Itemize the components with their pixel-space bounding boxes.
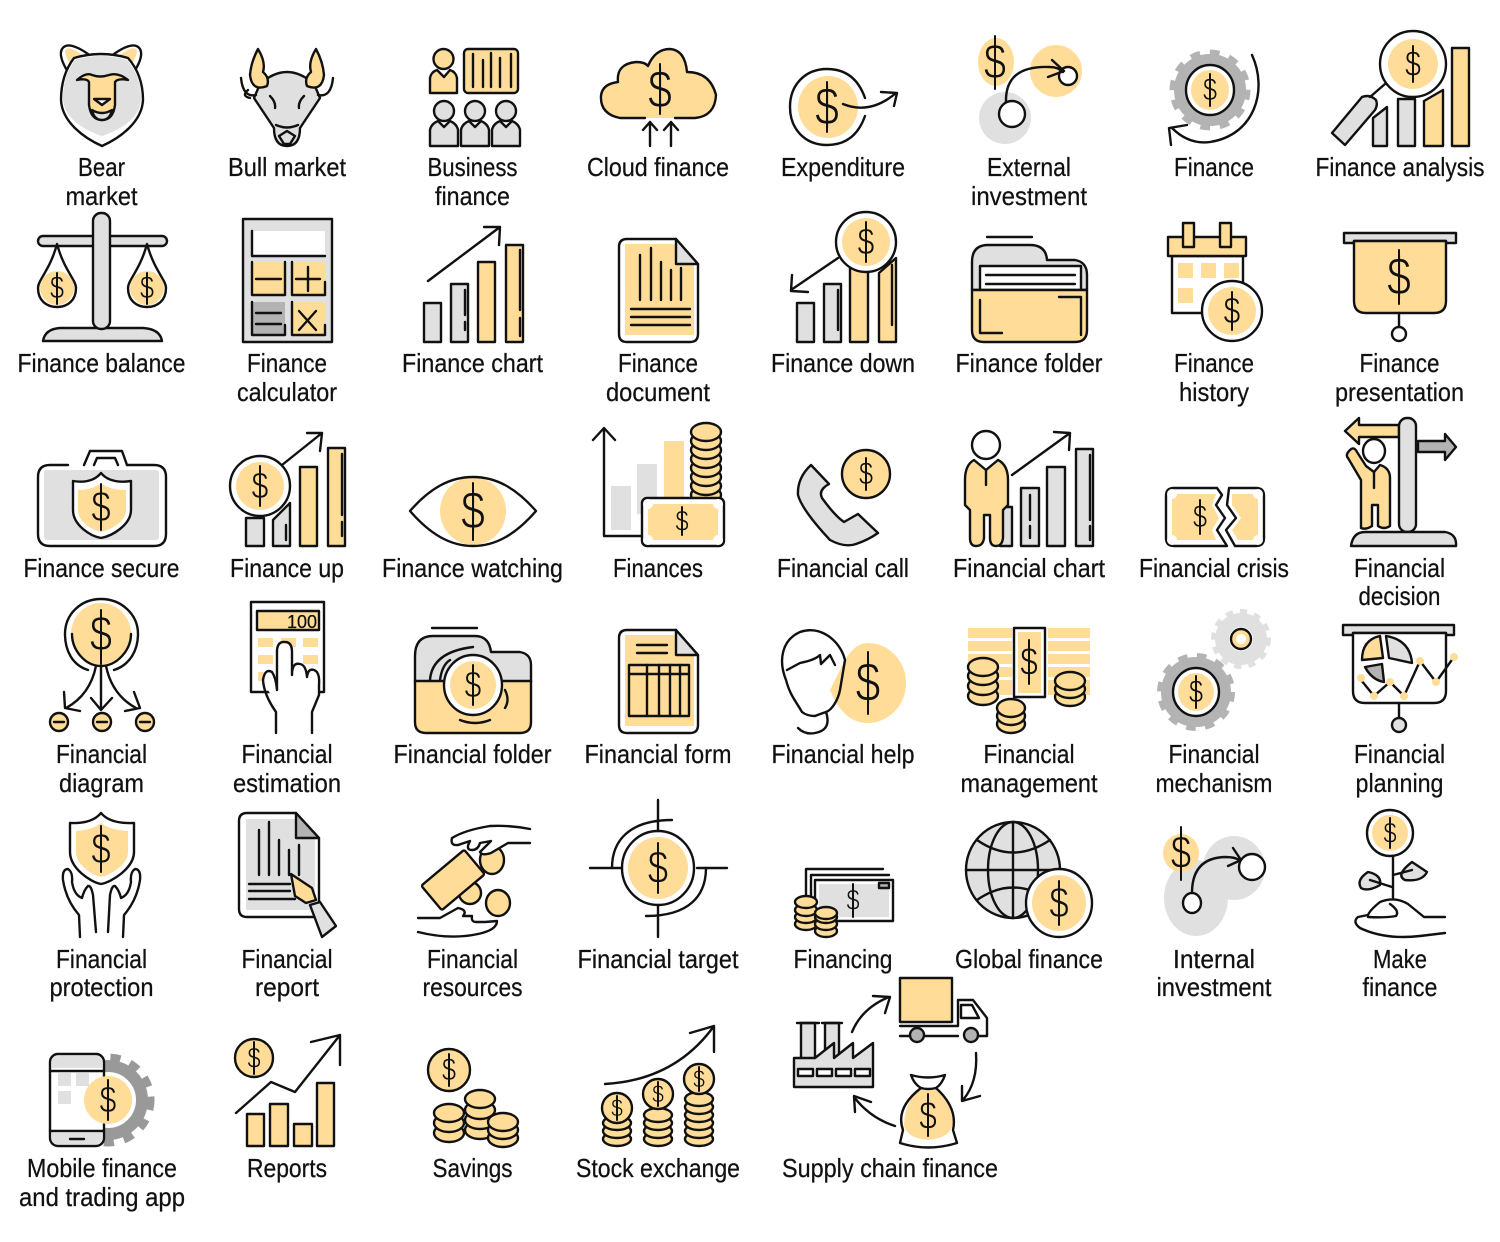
label: Finance (1174, 152, 1254, 182)
icon: coin plant in hand (1355, 810, 1445, 937)
panel: Bull market (228, 49, 347, 182)
label: Reports (247, 1153, 327, 1183)
label (1354, 739, 1445, 798)
icon: calendar with coin (1168, 223, 1262, 341)
display number: 100 (287, 612, 317, 632)
label: Financial crisis (1139, 553, 1289, 583)
panel: Financial crisis (1139, 488, 1289, 583)
panel: Financial planning (1343, 625, 1458, 798)
label: Finance down (771, 348, 915, 378)
icon: phone, gear and coin: $ (100, 1079, 116, 1121)
label (960, 739, 1098, 798)
icon: chart, coins and banknote (593, 423, 724, 546)
panel: Finance up (230, 433, 345, 583)
icon: eye: $ (461, 481, 485, 541)
label (66, 152, 138, 211)
label: Supply chain finance (782, 1153, 998, 1183)
icon: rising chart with coin (230, 433, 345, 546)
icon: person with coin: $ (856, 651, 880, 714)
panel: Cloud finance (587, 49, 729, 182)
icon: cloud: $ (648, 60, 672, 120)
icon: moving coin (978, 33, 1082, 144)
icon: calculator (243, 219, 332, 342)
label: mechanism (1156, 768, 1272, 798)
label: diagram (59, 768, 144, 798)
label: Finance up (230, 553, 344, 583)
label: Finance (1174, 348, 1254, 378)
panel: External investment (971, 33, 1088, 211)
label: document (606, 377, 711, 407)
icon: coin with arrow: $ (815, 77, 839, 137)
icon: rising coin stacks (602, 1026, 714, 1146)
icon: rising coin stacks: $ (611, 1094, 623, 1122)
panel: Financing (794, 869, 893, 974)
label: External (987, 152, 1071, 182)
icon: shield in hands (63, 813, 140, 937)
icon: scales (38, 213, 167, 341)
icon: chart, coins and banknote: $ (675, 503, 689, 538)
icon: moving coin (1163, 826, 1265, 936)
icon: coin and stacks: $ (442, 1053, 456, 1088)
panel: Financial help (772, 630, 914, 769)
icon: presentation board with charts (1343, 625, 1458, 732)
label: Savings (432, 1153, 512, 1183)
icon: hands, coins and note (418, 826, 530, 937)
label: Finance chart (402, 348, 544, 378)
panel: Finance history (1168, 223, 1262, 407)
icon: falling chart with coin: $ (858, 221, 874, 263)
panel: Financial call (777, 450, 909, 583)
icon: gear with arrow: $ (1203, 73, 1217, 108)
panel: Supply chain finance (782, 978, 998, 1183)
label (971, 152, 1088, 211)
icon: person and chart (965, 431, 1093, 546)
icon: notes and coins: $ (846, 882, 860, 917)
label (19, 1153, 185, 1212)
icon: briefcase with shield: $ (91, 483, 111, 531)
panel: Internal investment (1156, 826, 1272, 1002)
label (1335, 348, 1464, 407)
icon: person with coin (782, 630, 906, 733)
label: Finance balance (18, 348, 186, 378)
icon: presentation board: $ (1387, 247, 1411, 307)
label (237, 348, 337, 407)
icon: eye (410, 477, 536, 546)
icon: shield in hands: $ (91, 825, 111, 873)
panel: Stock exchange (576, 1026, 740, 1183)
label: finance (435, 181, 510, 211)
label (233, 739, 341, 798)
label: Financial call (777, 553, 909, 583)
label: investment (1156, 972, 1272, 1002)
icon: rising coin stacks: $ (652, 1080, 664, 1108)
panel: Finance (1169, 54, 1259, 182)
label (50, 944, 154, 1002)
label: calculator (237, 377, 337, 407)
panel: Financial diagram (50, 599, 154, 798)
panel: Financial report (239, 813, 336, 1002)
label (606, 348, 711, 407)
label: Financial form (584, 739, 732, 769)
icon: briefcase with shield (38, 451, 166, 546)
icon: magnifier over bars (1332, 31, 1469, 146)
icon: coin plant in hand: $ (1383, 815, 1397, 850)
panel: Bear market (61, 45, 143, 211)
panel: Financial decision (1345, 418, 1456, 611)
label (1362, 944, 1438, 1002)
icon: target coin (590, 800, 727, 937)
panel: Financial management (960, 628, 1098, 798)
label: Financial (56, 944, 147, 974)
icon: moving coin: $ (1171, 826, 1191, 878)
icon: globe and coin: $ (1049, 879, 1069, 927)
label: Financial (984, 739, 1074, 769)
label (1174, 348, 1254, 407)
icon: banknotes and coins (968, 628, 1090, 733)
icon: banknotes and coins: $ (1020, 639, 1038, 684)
label: planning (1356, 768, 1444, 798)
panel: Expenditure (781, 69, 905, 182)
label: Bear (78, 152, 125, 182)
label: finance (1362, 972, 1438, 1002)
label: market (66, 181, 138, 211)
label: presentation (1335, 377, 1464, 407)
panel: Finances (593, 423, 724, 583)
icon: folder with coin: $ (465, 664, 481, 706)
panel: Global finance (955, 822, 1103, 974)
icon: presentation board (1344, 233, 1456, 341)
label: Cloud finance (587, 152, 729, 182)
icon: rising coin stacks: $ (693, 1065, 705, 1093)
label: management (960, 768, 1098, 798)
icon: phone, gear and coin (50, 1054, 150, 1146)
icon: magnifier over bars: $ (1405, 43, 1421, 84)
icon: signpost and person (1345, 418, 1456, 546)
icon: target coin: $ (648, 841, 668, 893)
label: history (1179, 377, 1249, 407)
label: Finance (247, 348, 327, 378)
icon: calendar with coin: $ (1224, 290, 1240, 332)
label: Financial folder (394, 739, 552, 769)
icon: folder with coin (415, 628, 531, 733)
icon: bars, arrow and coin (235, 1035, 340, 1146)
label: Internal (1173, 944, 1255, 974)
label: investment (971, 181, 1088, 211)
label: estimation (233, 768, 341, 798)
icon: two gears: $ (1189, 675, 1203, 710)
panel: Financial mechanism (1156, 612, 1272, 798)
label: Financial (242, 944, 332, 974)
panel: Finance down (771, 212, 915, 378)
label: Finances (613, 553, 703, 583)
panel: Financial protection (50, 813, 154, 1002)
label: protection (50, 972, 154, 1002)
label: resources (422, 972, 522, 1002)
icon: moving coin: $ (984, 33, 1006, 90)
label: Business (428, 152, 518, 182)
icon: form document (619, 630, 698, 733)
icon: report and pen (239, 813, 336, 937)
icon: broken banknote: $ (1193, 500, 1207, 535)
label: Financial help (772, 739, 914, 769)
panel: Finance analysis (1316, 31, 1484, 182)
label: Mobile finance (27, 1153, 177, 1183)
label: Financial chart (953, 553, 1106, 583)
label: Financing (794, 944, 892, 974)
icon: factory, truck and money bag (794, 978, 987, 1148)
icon: coin with three arrows (50, 599, 154, 731)
panel: Financial target (578, 800, 739, 974)
icon: scales: $ (140, 271, 154, 306)
label: Financial (242, 739, 332, 769)
label: Financial (1354, 739, 1445, 769)
icon: document (619, 239, 698, 342)
panel: Finance calculator (237, 219, 337, 407)
label: Financial (1354, 553, 1445, 583)
icon: bull (241, 49, 333, 146)
label: Stock exchange (576, 1153, 740, 1183)
icon: falling chart with coin (791, 212, 896, 342)
icon: cloud (601, 49, 716, 146)
label: and trading app (19, 1182, 185, 1212)
label: Make (1373, 944, 1427, 974)
panel: Finance presentation (1335, 233, 1464, 407)
label (422, 944, 522, 1002)
panel: Business finance (428, 49, 520, 211)
panel: Finance folder (956, 237, 1103, 378)
icon: factory, truck and money bag: $ (919, 1093, 937, 1138)
panel: Finance watching (382, 477, 563, 583)
label (1156, 944, 1272, 1002)
label (1156, 739, 1272, 798)
panel: Financial folder (394, 628, 552, 769)
icon: folder (972, 237, 1087, 342)
panel: Financial form (584, 630, 732, 769)
label (428, 152, 518, 211)
icon: globe and coin (966, 822, 1092, 937)
label: Global finance (955, 944, 1103, 974)
label (242, 944, 332, 1002)
icon: people and board (430, 49, 520, 146)
icon: phone and coin: $ (859, 457, 873, 492)
label: Financial target (578, 944, 739, 974)
label: report (255, 972, 320, 1002)
panel: Finance secure (24, 451, 180, 583)
icon: coin with three arrows: $ (90, 605, 112, 662)
icon: bars, arrow and coin: $ (247, 1040, 261, 1075)
panel: Reports (235, 1035, 340, 1183)
panel: Financial chart (953, 431, 1106, 583)
label: Finance (618, 348, 698, 378)
label: decision (1358, 581, 1440, 611)
panel: Mobile finance and trading app (19, 1054, 185, 1212)
label: Bull market (228, 152, 347, 182)
icon: rising bars (424, 227, 523, 342)
label: Finance folder (956, 348, 1103, 378)
icon: calculator and hand (251, 602, 324, 733)
panel: Savings (428, 1049, 518, 1183)
panel: Finance document (606, 239, 711, 407)
label (56, 739, 147, 798)
panel: Finance balance (18, 213, 186, 378)
label: Financial (56, 739, 147, 769)
icon: scales: $ (50, 271, 64, 306)
icon: broken banknote (1166, 488, 1264, 546)
label: Expenditure (781, 152, 905, 182)
label: Financial (427, 944, 518, 974)
panel: Financial estimation (233, 602, 341, 798)
panel: Make finance (1355, 810, 1445, 1002)
panel: Financial resources (418, 826, 530, 1002)
panel: Finance chart (402, 227, 544, 378)
icon: rising chart with coin: $ (252, 465, 268, 507)
label: Finance watching (382, 553, 563, 583)
label: Finance (1360, 348, 1440, 378)
label: Finance secure (24, 553, 180, 583)
icon: two gears (1161, 612, 1268, 727)
icon: bear (61, 45, 143, 146)
label: Financial (1168, 739, 1260, 769)
label (1354, 553, 1445, 611)
